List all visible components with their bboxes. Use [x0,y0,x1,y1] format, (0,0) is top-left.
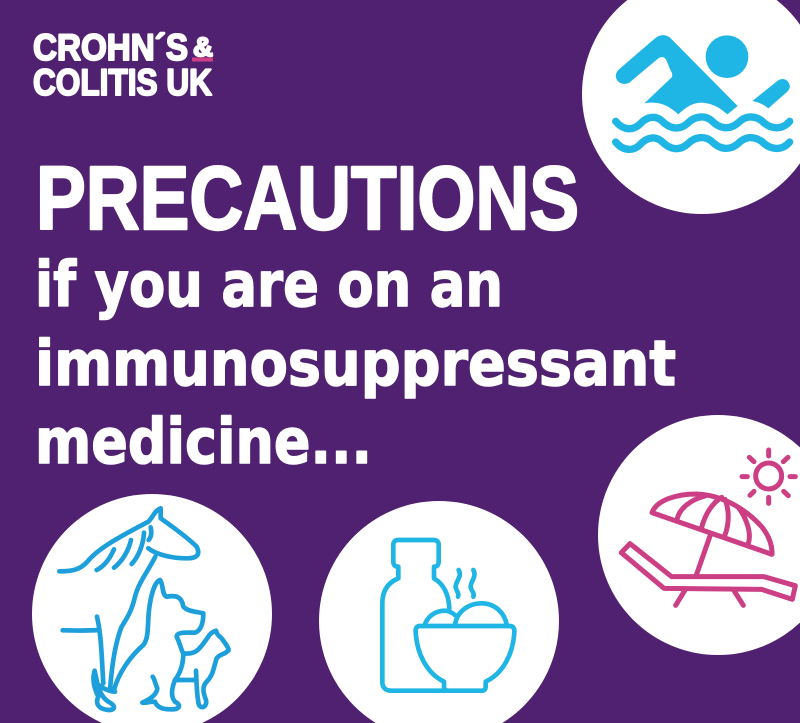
subtitle: immunosuppressant [35,327,676,400]
subtitle [35,248,676,478]
panel: swimming [582,0,800,214]
icon: swimmer [616,35,790,149]
subtitle: medicine... [35,405,372,478]
subtitle: if you are on an [35,248,503,321]
panel: animals [32,494,272,723]
logo: Crohn's & Colitis UK: COLITIS UK [33,62,212,103]
panel: food and drink [319,501,559,723]
panel: sun safety [598,415,800,655]
title: Precautions: PRECAUTIONS [36,149,579,249]
logo: Crohn's & Colitis UK: & [193,32,213,62]
icon: horse, dog and cat [59,508,229,710]
logo: Crohn's & Colitis UK: CROHN´S [33,27,188,68]
icon: bottle and bowl [382,540,514,691]
logo: Crohn's & Colitis UK [33,27,213,103]
icon: parasol, sun lounger and sun [621,450,795,605]
